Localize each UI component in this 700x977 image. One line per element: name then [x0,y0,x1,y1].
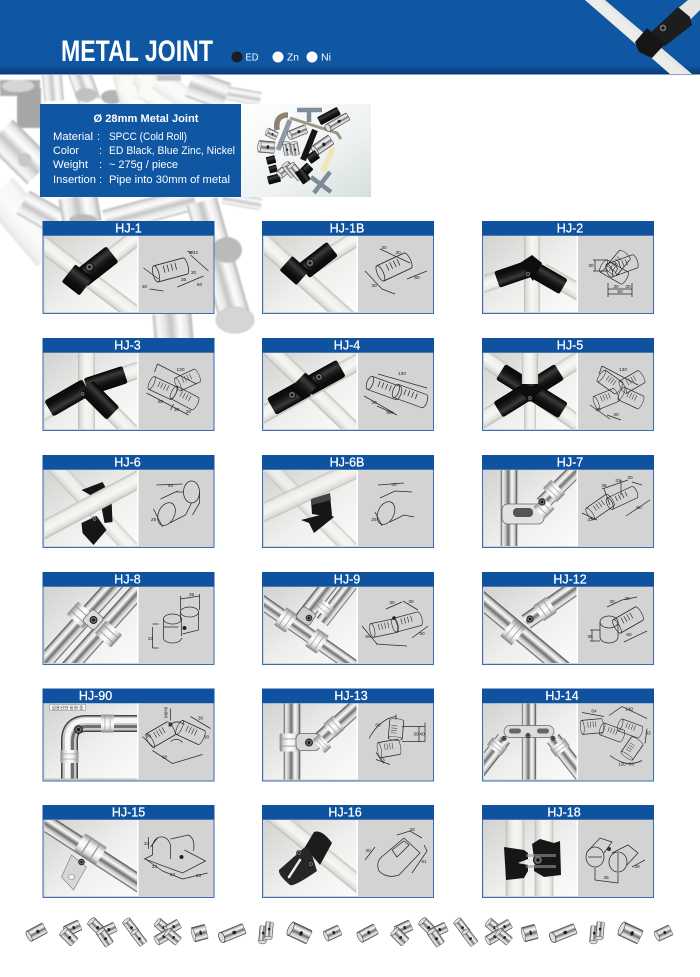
heading: HJ-14 [482,688,654,703]
diagram: HJ-13 dimensions [369,714,425,764]
panel: HJ-9: HJ-9 [334,572,360,586]
diagram: HJ-4 dimensions: 130 [398,371,406,377]
heading: HJ-2 [482,221,654,236]
diagram: HJ-90 dimensions [142,707,210,764]
background: faded joint photo collage [0,66,262,343]
heading: 28mm metal joint: Ø 28mm Metal Joint [94,113,199,125]
icon: joint 12 [390,920,413,946]
diagram: HJ-15 dimensions: 23 [170,872,175,878]
diagram: HJ-1 dimensions: 35 [181,277,186,283]
diagram: HJ-14 dimensions: 33 [645,730,651,736]
icon: joint 20 [653,925,673,942]
icon: joint 2 [59,920,82,946]
diagram: HJ-18 dimensions: 45 [603,875,609,881]
icon: joint 5 [153,918,182,946]
panel: HJ-1B: HJ-1B [330,222,364,236]
diagram: HJ-13 dimensions: 33 [379,758,385,764]
diagram: HJ-1 dimensions [142,250,208,291]
diagram: HJ-9 dimensions [362,599,428,646]
diagram: HJ-3 dimensions [146,364,202,415]
diagram: HJ-5 dimensions: 30 [595,407,601,413]
specification list: ~ 275g / piece [109,159,178,171]
photo: HJ-13 [280,704,356,780]
icon: joint 11 [356,924,379,943]
icon: joint 16 [520,924,538,942]
icon: joint 18 [589,922,605,944]
panel: HJ-7 [482,455,654,548]
panel: HJ-13 [262,688,434,782]
panel: HJ-16 [262,805,434,898]
heading: HJ-12 [482,572,654,587]
specification list: SPCC (Cold Roll) [109,131,187,143]
finish legend: Ni [321,52,331,64]
diagram: HJ-5 dimensions [590,366,646,420]
heading: HJ-1B [262,221,434,236]
diagram: HJ-90 dimensions: 60 [162,754,167,760]
diagram: HJ-8 dimensions [148,592,200,648]
diagram: HJ-1 dimensions: 30 [142,284,147,290]
panel: HJ-8: HJ-8 [114,572,141,586]
diagram: HJ-18 dimensions [586,838,645,883]
panel: HJ-15: HJ-15 [112,806,145,820]
panel: HJ-7: HJ-7 [557,456,583,470]
heading: HJ-9 [262,572,434,587]
diagram: HJ-7 dimensions: 36 [601,483,607,489]
specification list: Material [53,131,93,143]
diagram: HJ-3 dimensions: 30 [174,407,179,413]
diagram: HJ-7 dimensions: 30 [627,475,633,481]
diagram: HJ-9 dimensions: 30 [408,599,414,605]
heading: HJ-4 [262,338,434,353]
photo: HJ-8 [44,587,137,663]
photo: HJ-1 [44,236,137,312]
panel: HJ-4 [262,338,434,431]
diagram: HJ-8 dimensions: 33 [148,636,153,642]
panel: HJ-18 [482,805,654,898]
diagram: HJ-14 dimensions: 120~90° [618,762,636,768]
diagram: HJ-2 dimensions: 30 [613,284,619,290]
diagram: HJ-1B dimensions: 30 [395,250,401,256]
diagram: HJ-7 dimensions: 33 [587,517,593,523]
diagram: HJ-2 dimensions: 30 [588,263,594,269]
diagram: HJ-14 dimensions: 64 [591,708,597,714]
diagram: HJ-1 dimensions: 30 [191,270,196,276]
diagram: HJ-13 dimensions: 30 [413,732,419,738]
diagram: HJ-7 dimensions [582,475,650,523]
panel: HJ-12 [482,572,654,665]
diagram: HJ-18 dimensions: 30 [634,864,640,870]
header band [0,0,700,75]
specification list: Color [53,145,79,157]
panel: HJ-12: HJ-12 [553,572,587,586]
panel: HJ-14 [482,688,654,782]
diagram: HJ-15 dimensions: 33 [144,841,149,847]
heading: HJ-5 [482,338,654,353]
diagram: HJ-7 dimensions: 33 [615,478,621,484]
heading: HJ-3 [42,338,214,353]
panel: HJ-2 [482,221,654,314]
photo: HJ-16 [266,820,356,894]
panel: HJ-6 [42,455,214,548]
diagram: HJ-14 dimensions: 130 [625,706,633,712]
diagram: HJ-16 dimensions: 61 [421,859,427,865]
panel: HJ-9 [262,572,434,665]
bottom icon strip: small joints [25,916,673,947]
diagram: HJ-12 dimensions [587,596,647,643]
icon: joint 13 [417,916,448,947]
photo: HJ-6B [264,470,356,546]
diagram: HJ-1 dimensions: 60 [197,282,202,288]
heading: HJ-15 [42,805,214,820]
diagram: HJ-13 dimensions: 40 [419,732,425,738]
icon: joint 1 [25,923,48,942]
photo: HJ-15 [44,820,137,892]
icon: joint 17 [548,923,577,944]
panel: HJ-5 [482,338,654,431]
finish legend: ED [246,52,259,64]
icon: joint 8 [258,922,274,944]
photo: HJ-2 [484,236,576,312]
heading: HJ-6B [262,455,434,470]
diagram: HJ-2 dimensions: 60 [617,289,623,295]
panel: HJ-1B [262,221,434,314]
diagram: HJ-2 dimensions [588,249,640,297]
specification list: Pipe into 30mm of metal [109,174,230,186]
heading: HJ-8 [42,572,214,587]
diagram: HJ-3 dimensions: 130 [176,367,185,373]
diagram: HJ-6B dimensions: 40 [391,482,397,488]
specification list [53,131,235,186]
panel: HJ-2: HJ-2 [557,222,583,236]
diagram: HJ-3 dimensions: 60 [158,399,163,405]
diagram: HJ-6B dimensions [371,482,414,527]
diagram: HJ-15 dimensions: 23 [152,864,157,870]
sticker label: 실용신안 등원 중 [52,704,83,710]
diagram: HJ-90 dimensions: 30 [146,734,151,740]
diagram: HJ-3 dimensions: 30 [186,409,191,415]
diagram: HJ-1B dimensions: 30 [371,283,377,289]
panel: HJ-13: HJ-13 [334,689,368,703]
diagram: HJ-4 dimensions: 30 [371,400,377,406]
diagram: HJ-12 dimensions: 36 [587,634,593,640]
icon: joint 7 [217,923,246,944]
photo: HJ-6 [44,470,137,546]
diagram: HJ-5 dimensions: 130 [619,367,627,373]
heading: HJ-7 [482,455,654,470]
diagram: HJ-16 dimensions: 30 [365,848,371,854]
diagram: HJ-12 dimensions: 60 [626,632,632,638]
header corner photo: black joint on white pipes [585,0,700,74]
diagram: HJ-9 dimensions: 60 [419,631,425,637]
finish legend [232,52,331,64]
panel: HJ-6B [262,455,434,548]
photo: HJ-9 [264,587,356,663]
panel: specification box [40,104,241,197]
photo: HJ-5 [484,353,576,429]
panel: HJ-16: HJ-16 [328,806,362,820]
finish legend: Zn [287,52,299,64]
icon: joint 9 [285,921,312,944]
diagram: HJ-4 dimensions: 60 [386,410,392,416]
panel: HJ-18: HJ-18 [547,806,581,820]
panel: HJ-1: HJ-1 [115,222,142,236]
panel: HJ-3: HJ-3 [114,338,141,352]
icon: joint 15 [484,918,513,946]
diagram: HJ-1 dimensions: Ø42 [189,250,198,256]
diagram: HJ-13 dimensions: 60 [375,722,381,728]
diagram: HJ-6 dimensions: 40 [168,483,173,489]
photo: HJ-7 [500,470,576,546]
diagram: HJ-1B dimensions: 60 [414,275,420,281]
heading: HJ-90 [42,688,214,703]
icon: joint 19 [616,921,643,944]
specification list: Insertion [53,174,96,186]
icon: joint 14 [453,917,478,947]
diagram: HJ-16 dimensions: 33 [409,827,415,833]
icon: joint 10 [322,925,342,942]
diagram: HJ-12 dimensions: 30 [609,599,615,605]
specification list: : [99,145,102,157]
diagram: HJ-90 dimensions: 30 [198,716,203,722]
panel: HJ-15 [42,805,214,898]
heading: HJ-13 [262,688,434,703]
diagram: HJ-6B dimensions: 25 [371,517,377,523]
heading: HJ-1 [42,221,214,236]
panel: HJ-90 [42,688,214,784]
photo: HJ-3 [44,353,137,429]
diagram: HJ-2 dimensions: 30 [625,284,631,290]
diagram: HJ-7 dimensions: 60 [636,505,642,511]
panel: HJ-5: HJ-5 [557,338,583,352]
panel: HJ-3 [42,338,214,431]
photo: HJ-18 [504,820,561,896]
photo: HJ-90 elbow [44,714,138,784]
diagram: HJ-9 dimensions: 30 [389,600,395,606]
diagram: HJ-8 dimensions: 35 [189,592,194,598]
diagram: HJ-4 dimensions [364,371,429,416]
diagram: HJ-6 dimensions [151,481,200,528]
panel: HJ-6B: HJ-6B [330,456,364,470]
diagram: HJ-90 dimensions: 30 [204,734,209,740]
title: METAL JOINT [61,35,213,68]
photo: HJ-14 [484,704,576,780]
specification list: : [99,174,102,186]
photo: HJ-12 [484,587,576,663]
icon: joint 6 [190,924,208,942]
heading: HJ-16 [262,805,434,820]
diagram: HJ-90 dimensions: M8*8 [164,707,170,718]
diagram: HJ-5 dimensions: 30 [613,412,619,418]
heading: HJ-6 [42,455,214,470]
panel: HJ-8 [42,572,214,665]
photo: HJ-1B [264,236,356,312]
panel: HJ-14: HJ-14 [545,689,579,703]
diagram: HJ-1B dimensions [365,245,427,294]
panel: HJ-4: HJ-4 [334,338,360,352]
panel: HJ-1 [42,221,214,314]
diagram: HJ-6 dimensions: 25 [151,517,156,523]
diagram: HJ-12 dimensions: 30 [624,596,630,602]
panel: HJ-6: HJ-6 [114,456,141,470]
photo: HJ-4 [264,353,356,429]
diagram: HJ-1B dimensions: 30 [381,245,387,251]
specification list: : [97,131,100,143]
specification list: ED Black, Blue Zinc, Nickel [109,145,235,157]
diagram: HJ-15 dimensions: 23 [196,873,201,879]
diagram: HJ-14 dimensions [580,706,651,768]
panel: HJ-90: HJ-90 [79,689,112,703]
photo: assorted joints [241,104,371,197]
icon: joint 4 [122,917,147,947]
diagram: HJ-15 dimensions [144,835,208,879]
specification list: : [99,159,102,171]
heading: HJ-18 [482,805,654,820]
specification list: Weight [53,159,88,171]
diagram: HJ-16 dimensions [365,827,427,876]
diagram: HJ-9 dimensions: 69 [365,634,371,640]
icon: joint 3 [86,916,117,947]
